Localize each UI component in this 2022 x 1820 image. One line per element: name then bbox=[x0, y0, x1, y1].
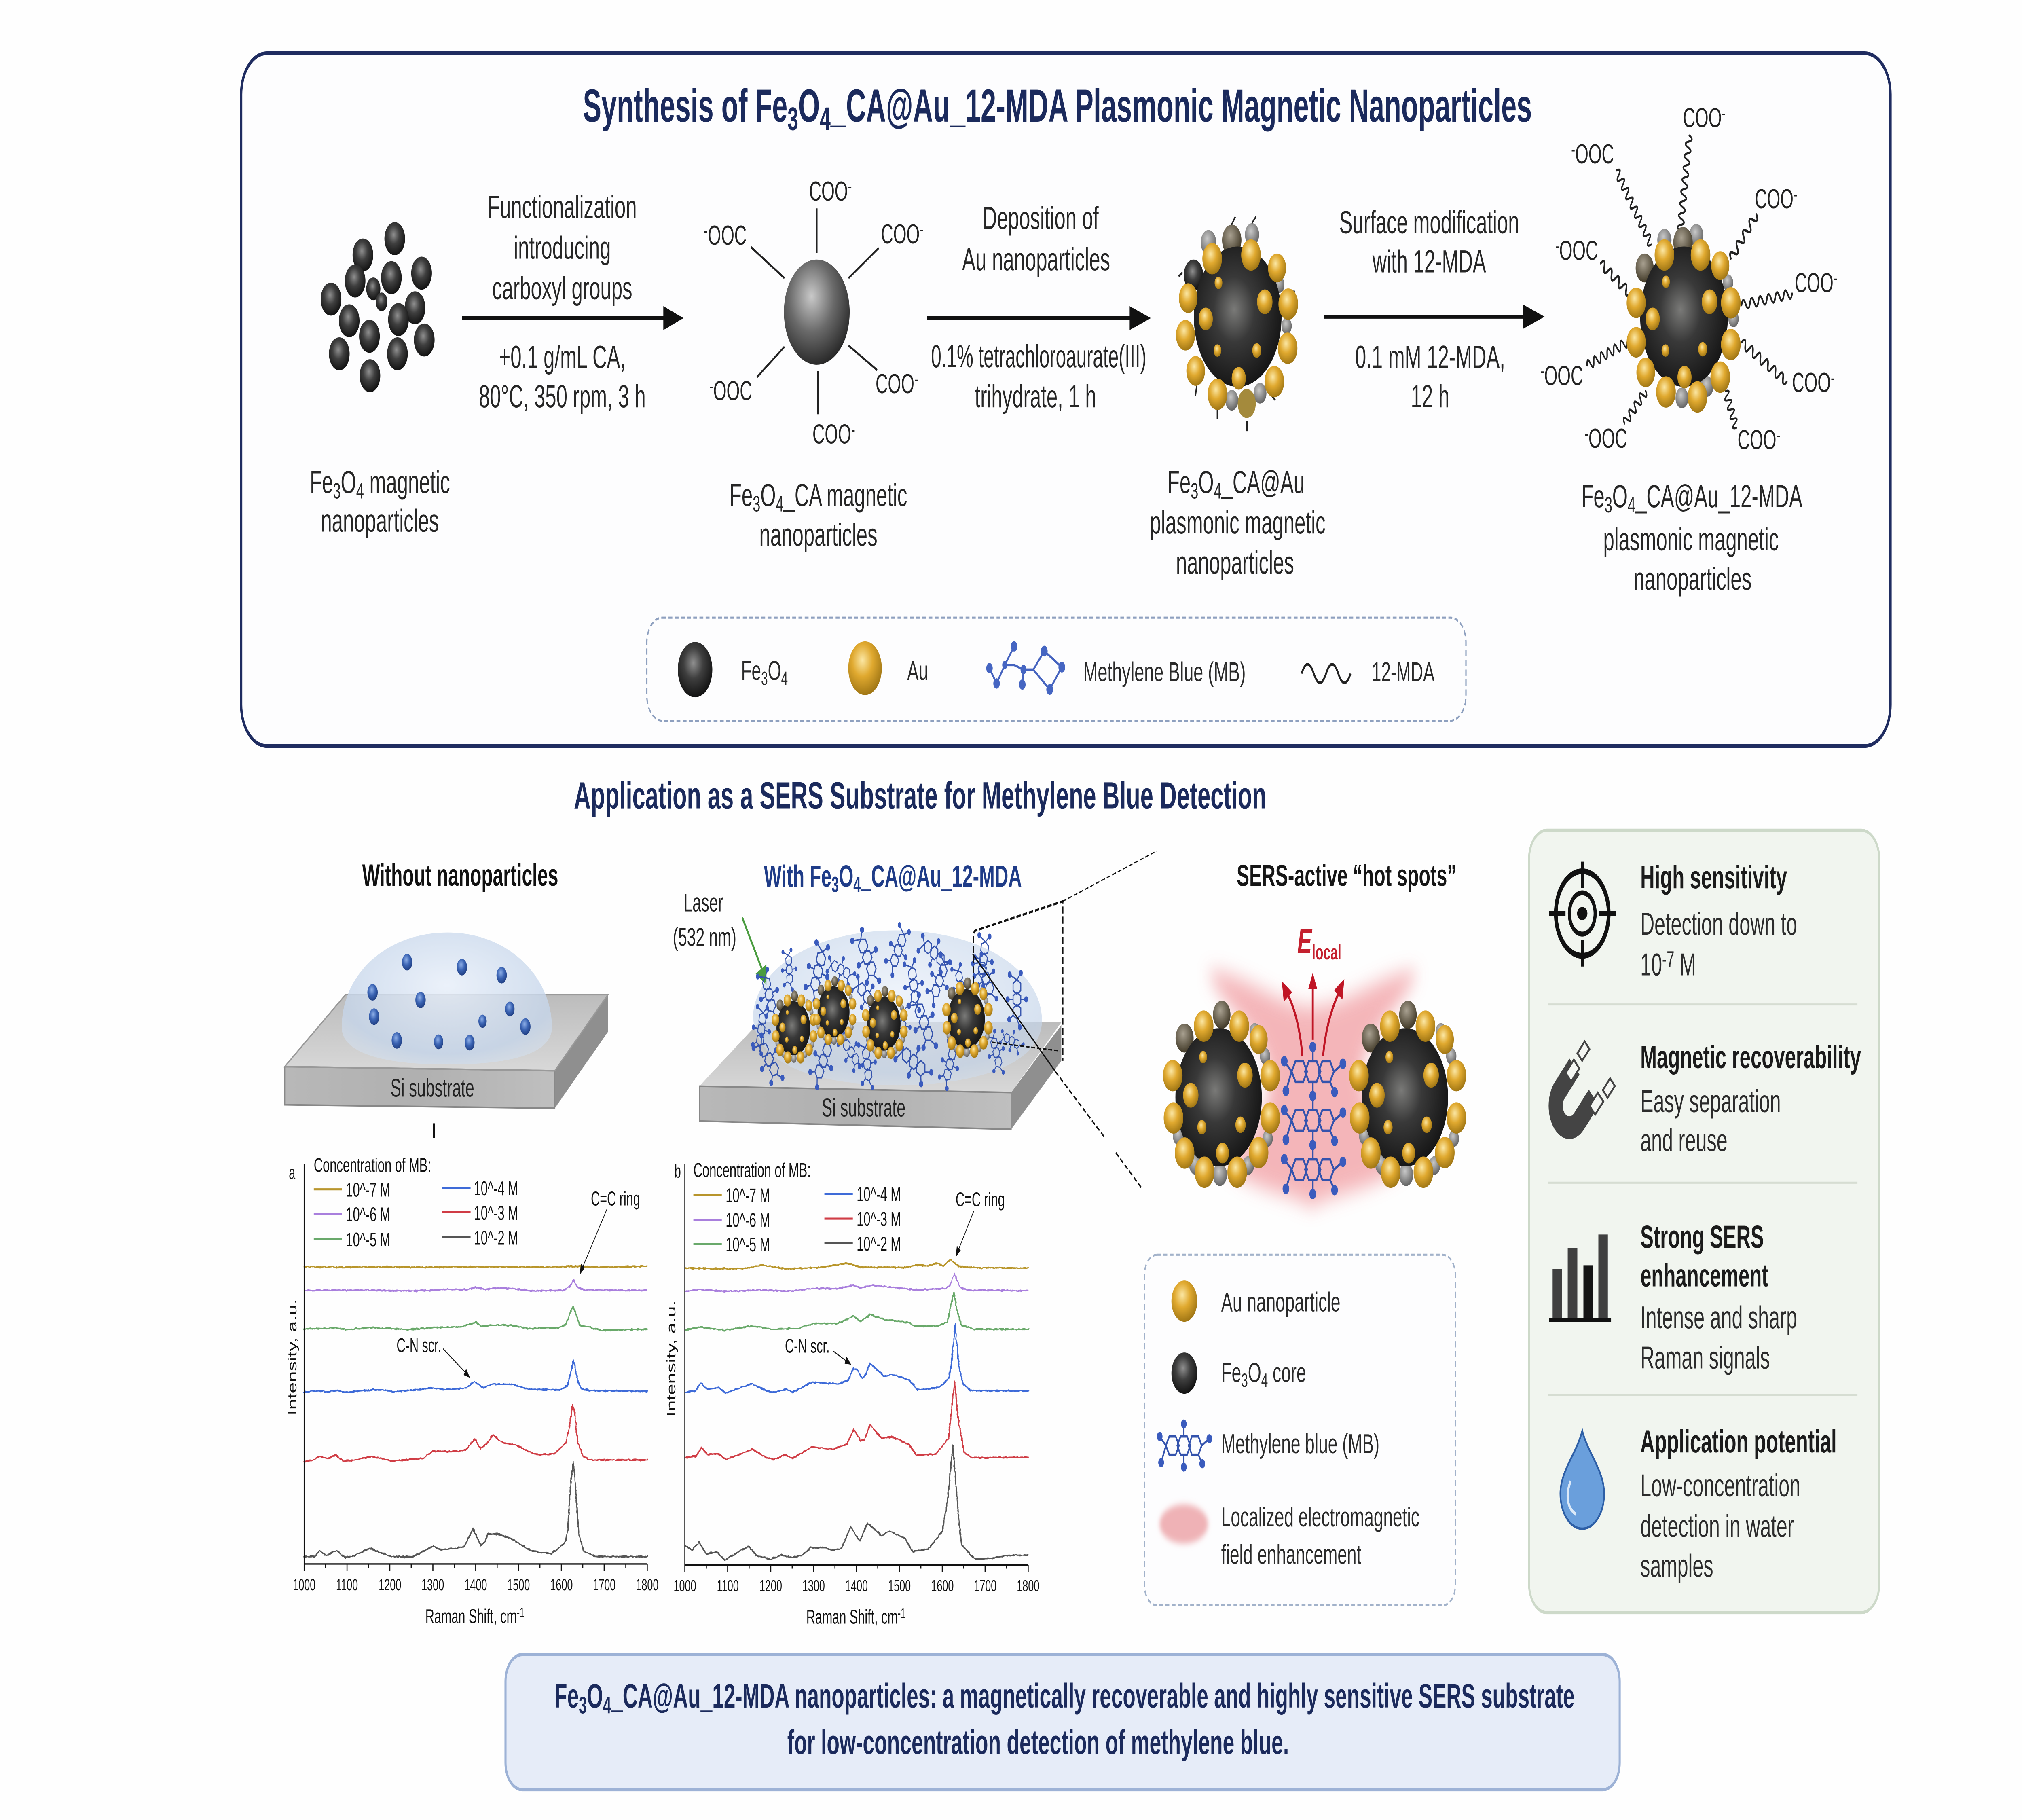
label: Fe3O4 magnetic nanoparticles: Fe3O4 magnetic bbox=[310, 464, 450, 504]
item: high sensitivity: 10-7 M bbox=[1640, 947, 1696, 982]
chart b: Raman spectra with nanoparticles: 1200 bbox=[759, 1577, 782, 1595]
text: 12-MDA modification step bbox=[1339, 205, 1519, 414]
chart a: Raman spectra without nanoparticles: 1400 bbox=[464, 1576, 487, 1594]
heading: without nanoparticles: Without nanoparticles bbox=[362, 857, 558, 893]
chart a: Raman spectra without nanoparticles: a bbox=[289, 1162, 296, 1183]
item: magnetic recoverability: Magnetic recoverability bbox=[1640, 1039, 1861, 1075]
heading: with nanoparticles: With Fe3O4_CA@Au_12-MDA bbox=[764, 859, 1022, 897]
label: laser: Laser bbox=[683, 889, 723, 917]
icon: magnet bbox=[1556, 1041, 1615, 1128]
label: Fe3O4_CA@Au_12-MDA plasmonic magnetic nanoparticles: Fe3O4_CA@Au_12-MDA bbox=[1581, 478, 1802, 518]
item: application potential: detection in water bbox=[1640, 1508, 1794, 1544]
legend: synthesis: Fe3O4 bbox=[741, 656, 788, 690]
text: 12-MDA modification step: 0.1 mM 12-MDA, bbox=[1355, 339, 1505, 375]
legend: synthesis: Au bbox=[907, 656, 928, 686]
icon: target bbox=[1549, 862, 1616, 967]
panel: synthesis bbox=[241, 53, 1891, 746]
item: application potential: Low-concentration bbox=[1640, 1468, 1800, 1503]
chart a: Raman spectra without nanoparticles: 10^-3 M bbox=[474, 1202, 518, 1224]
text: Au deposition step: Deposition of bbox=[983, 200, 1099, 236]
label: E local: Elocal bbox=[1297, 922, 1341, 964]
chart b: Raman spectra with nanoparticles: Concentration of MB: bbox=[694, 1159, 811, 1181]
icon: carboxyl functionalized particle bbox=[704, 176, 924, 449]
item: strong SERS enhancement bbox=[1640, 1219, 1797, 1375]
legend: hot spots: Au nanoparticle bbox=[1221, 1287, 1340, 1317]
illustration: substrate with nanoparticles bbox=[699, 918, 1061, 1129]
item: high sensitivity bbox=[1640, 859, 1797, 982]
icon: 12-MDA functionalized particle bbox=[1540, 103, 1838, 455]
text: functionalization step: 80°C, 350 rpm, 3 h bbox=[479, 379, 646, 414]
chart a: Raman spectra without nanoparticles: C=C ring bbox=[591, 1187, 640, 1210]
item: magnetic recoverability bbox=[1640, 1039, 1861, 1158]
icon: 12-MDA functionalized particle: COO- bbox=[1755, 184, 1798, 214]
icon: carboxyl functionalized particle: -OOC bbox=[709, 375, 752, 406]
chart a: Raman spectra without nanoparticles: Intensity, a.u. bbox=[285, 1299, 299, 1415]
item: application potential: Application potential bbox=[1640, 1424, 1837, 1459]
chart a: Raman spectra without nanoparticles: Raman Shift, cm-1 bbox=[425, 1605, 525, 1627]
chart a: Raman spectra without nanoparticles: 1200 bbox=[379, 1576, 401, 1594]
item: high sensitivity: Detection down to bbox=[1640, 906, 1797, 942]
chart b: Raman spectra with nanoparticles: 10^-4 M bbox=[857, 1183, 901, 1206]
chart b: Raman spectra with nanoparticles: 10^-6 M bbox=[725, 1209, 770, 1231]
chart b: Raman spectra with nanoparticles: 1700 bbox=[974, 1577, 996, 1595]
callout: zoom lines to hot spot bbox=[973, 851, 1156, 1189]
text: Au deposition step bbox=[931, 200, 1146, 414]
icon: 12-MDA functionalized particle: -OOC bbox=[1584, 423, 1627, 453]
icon: Fe3O4 nanoparticle cluster bbox=[321, 222, 435, 392]
chart a: Raman spectra without nanoparticles: 10^-7 M bbox=[346, 1179, 390, 1201]
text: functionalization step: carboxyl groups bbox=[492, 271, 632, 306]
item: magnetic recoverability: Easy separation bbox=[1640, 1084, 1781, 1119]
icon: 12-MDA functionalized particle: COO- bbox=[1792, 367, 1835, 398]
item: strong SERS enhancement: Intense and sharp bbox=[1640, 1299, 1797, 1335]
chart a: Raman spectra without nanoparticles: Concentration of MB: bbox=[314, 1154, 431, 1176]
heading: application: Application as a SERS Substrate for Methylene Blue Detection bbox=[574, 774, 1266, 817]
icon: water drop bbox=[1560, 1431, 1604, 1529]
icon: 12-MDA functionalized particle: -OOC bbox=[1571, 139, 1614, 169]
text: functionalization step bbox=[479, 189, 646, 414]
icon: carboxyl functionalized particle: -OOC bbox=[704, 220, 747, 250]
chart b: Raman spectra with nanoparticles: 1600 bbox=[931, 1577, 954, 1595]
arrow: Au deposition bbox=[927, 306, 1151, 330]
chart a: Raman spectra without nanoparticles: 1500 bbox=[507, 1576, 530, 1594]
label: laser bbox=[673, 889, 736, 952]
label: Fe3O4_CA magnetic nanoparticles: Fe3O4_CA magnetic bbox=[730, 477, 907, 516]
title: synthesis: Synthesis of Fe3O4_CA@Au_12-MDA Plasmonic Magnetic Nanoparticles bbox=[583, 80, 1532, 137]
label: Fe3O4_CA@Au plasmonic magnetic nanoparticles: plasmonic magnetic bbox=[1150, 505, 1326, 540]
chart a: Raman spectra without nanoparticles: 1100 bbox=[336, 1576, 358, 1594]
legend: hot spots bbox=[1144, 1255, 1455, 1606]
item: magnetic recoverability: and reuse bbox=[1640, 1122, 1728, 1158]
chart a: Raman spectra without nanoparticles: C-N scr. bbox=[397, 1334, 441, 1357]
label: Fe3O4 magnetic nanoparticles: nanoparticles bbox=[321, 503, 439, 538]
item: application potential: samples bbox=[1640, 1548, 1713, 1583]
illustration: substrate without nanoparticles: Si substrate bbox=[391, 1074, 474, 1103]
icon: 12-MDA functionalized particle: COO- bbox=[1795, 267, 1838, 298]
legend: hot spots: Localized electromagnetic bbox=[1221, 1502, 1419, 1532]
icon: bar chart bbox=[1549, 1234, 1611, 1322]
chart b: Raman spectra with nanoparticles bbox=[664, 1159, 1039, 1628]
molecules: methylene blue in gap bbox=[1281, 1042, 1346, 1199]
chart a: Raman spectra without nanoparticles: 10^-4 M bbox=[474, 1177, 518, 1200]
banner: conclusion bbox=[506, 1655, 1620, 1790]
text: 12-MDA modification step: Surface modification bbox=[1339, 205, 1519, 240]
icon: carboxyl functionalized particle: COO- bbox=[876, 368, 918, 399]
text: functionalization step: +0.1 g/mL CA, bbox=[499, 339, 626, 375]
chart b: Raman spectra with nanoparticles: b bbox=[675, 1161, 681, 1182]
chart a: Raman spectra without nanoparticles: 1300 bbox=[421, 1576, 444, 1594]
chart a: Raman spectra without nanoparticles: 1700 bbox=[593, 1576, 615, 1594]
text: 12-MDA modification step: 12 h bbox=[1411, 379, 1449, 414]
text: Au deposition step: 0.1% tetrachloroaurate(III) bbox=[931, 339, 1146, 374]
legend: synthesis bbox=[647, 618, 1466, 721]
arrows: E local field bbox=[1282, 973, 1344, 1056]
icon: Au decorated particle bbox=[1176, 217, 1298, 431]
arrow: functionalization bbox=[462, 306, 683, 330]
chart a: Raman spectra without nanoparticles: 10^-2 M bbox=[474, 1227, 518, 1249]
chart b: Raman spectra with nanoparticles: C=C ring bbox=[956, 1188, 1005, 1211]
chart b: Raman spectra with nanoparticles: 1300 bbox=[802, 1577, 825, 1595]
legend: hot spots: field enhancement bbox=[1221, 1539, 1362, 1570]
chart b: Raman spectra with nanoparticles: 10^-2 M bbox=[857, 1233, 901, 1255]
illustration: hot spot between two particles bbox=[1163, 922, 1466, 1207]
text: Au deposition step: trihydrate, 1 h bbox=[975, 379, 1096, 414]
icon: carboxyl functionalized particle: COO- bbox=[812, 419, 855, 449]
item: strong SERS enhancement: Strong SERS bbox=[1640, 1219, 1764, 1255]
field enhancement glow bbox=[1207, 971, 1419, 1207]
icon: 12-MDA functionalized particle: -OOC bbox=[1540, 360, 1583, 391]
label: Fe3O4_CA@Au_12-MDA plasmonic magnetic nanoparticles bbox=[1581, 478, 1802, 597]
banner: conclusion: for low-concentration detection of methylene blue. bbox=[787, 1723, 1289, 1761]
banner: conclusion: Fe3O4_CA@Au_12-MDA nanoparticles: a magnetically recoverable and highly sensitive SERS substrate bbox=[554, 1676, 1574, 1719]
icon: carboxyl functionalized particle: COO- bbox=[881, 219, 924, 249]
chart b: Raman spectra with nanoparticles: 10^-7 M bbox=[725, 1184, 770, 1206]
icon: carboxyl functionalized particle: COO- bbox=[809, 176, 852, 206]
chart b: Raman spectra with nanoparticles: 10^-5 M bbox=[725, 1234, 770, 1256]
label: Fe3O4_CA@Au plasmonic magnetic nanoparticles bbox=[1150, 464, 1326, 580]
chart a: Raman spectra without nanoparticles bbox=[285, 1154, 658, 1627]
chart b: Raman spectra with nanoparticles: 1400 bbox=[845, 1577, 868, 1595]
text: Au deposition step: Au nanoparticles bbox=[962, 241, 1110, 277]
chart b: Raman spectra with nanoparticles: Intensity, a.u. bbox=[664, 1301, 678, 1417]
item: strong SERS enhancement: Raman signals bbox=[1640, 1340, 1770, 1375]
text: 12-MDA modification step: with 12-MDA bbox=[1372, 244, 1486, 279]
chart b: Raman spectra with nanoparticles: C-N scr. bbox=[785, 1335, 830, 1357]
label: Fe3O4_CA magnetic nanoparticles: nanoparticles bbox=[759, 517, 878, 552]
arrow: green laser bbox=[742, 918, 766, 985]
chart b: Raman spectra with nanoparticles: 1500 bbox=[888, 1577, 911, 1595]
label: laser: (532 nm) bbox=[673, 924, 736, 952]
legend: synthesis: 12-MDA bbox=[1372, 656, 1435, 687]
item: application potential bbox=[1640, 1424, 1837, 1583]
item: high sensitivity: High sensitivity bbox=[1640, 859, 1787, 895]
chart b: Raman spectra with nanoparticles: 1100 bbox=[717, 1577, 739, 1595]
label: Fe3O4_CA@Au_12-MDA plasmonic magnetic nanoparticles: plasmonic magnetic bbox=[1603, 522, 1779, 557]
illustration: substrate without nanoparticles bbox=[285, 933, 608, 1108]
icon: 12-MDA functionalized particle: -OOC bbox=[1555, 235, 1598, 266]
item: strong SERS enhancement: enhancement bbox=[1640, 1258, 1768, 1293]
text: functionalization step: Functionalization bbox=[488, 189, 637, 224]
arrow: 12-MDA modification bbox=[1324, 305, 1545, 329]
label: Fe3O4 magnetic nanoparticles bbox=[310, 464, 450, 538]
chart a: Raman spectra without nanoparticles: 10^-6 M bbox=[346, 1203, 390, 1226]
illustration: substrate with nanoparticles: Si substrate bbox=[822, 1094, 905, 1122]
chart a: Raman spectra without nanoparticles: 10^-5 M bbox=[346, 1229, 390, 1251]
chart b: Raman spectra with nanoparticles: 1800 bbox=[1017, 1577, 1039, 1595]
chart a: Raman spectra without nanoparticles: 1800 bbox=[636, 1576, 658, 1594]
label: Fe3O4_CA@Au_12-MDA plasmonic magnetic nanoparticles: nanoparticles bbox=[1633, 561, 1751, 597]
label: Fe3O4_CA magnetic nanoparticles bbox=[730, 477, 907, 552]
legend: synthesis: Methylene Blue (MB) bbox=[1083, 656, 1246, 687]
icon: 12-MDA functionalized particle: COO- bbox=[1683, 103, 1726, 133]
label: Fe3O4_CA@Au plasmonic magnetic nanoparticles: nanoparticles bbox=[1176, 545, 1294, 580]
chart b: Raman spectra with nanoparticles: Raman Shift, cm-1 bbox=[806, 1606, 905, 1628]
panel: key properties bbox=[1529, 830, 1879, 1613]
legend: hot spots: Methylene blue (MB) bbox=[1221, 1428, 1379, 1459]
text: functionalization step: introducing bbox=[514, 230, 611, 265]
chart a: Raman spectra without nanoparticles: 1600 bbox=[550, 1576, 573, 1594]
heading: hot spots: SERS-active “hot spots” bbox=[1237, 859, 1457, 893]
chart b: Raman spectra with nanoparticles: 10^-3 M bbox=[857, 1208, 901, 1230]
icon: 12-MDA functionalized particle: COO- bbox=[1738, 424, 1780, 455]
chart a: Raman spectra without nanoparticles: 1000 bbox=[293, 1576, 315, 1594]
legend: hot spots: Fe3O4 core bbox=[1221, 1357, 1306, 1391]
label: Fe3O4_CA@Au plasmonic magnetic nanoparticles: Fe3O4_CA@Au bbox=[1168, 464, 1305, 504]
chart b: Raman spectra with nanoparticles: 1000 bbox=[674, 1577, 696, 1595]
